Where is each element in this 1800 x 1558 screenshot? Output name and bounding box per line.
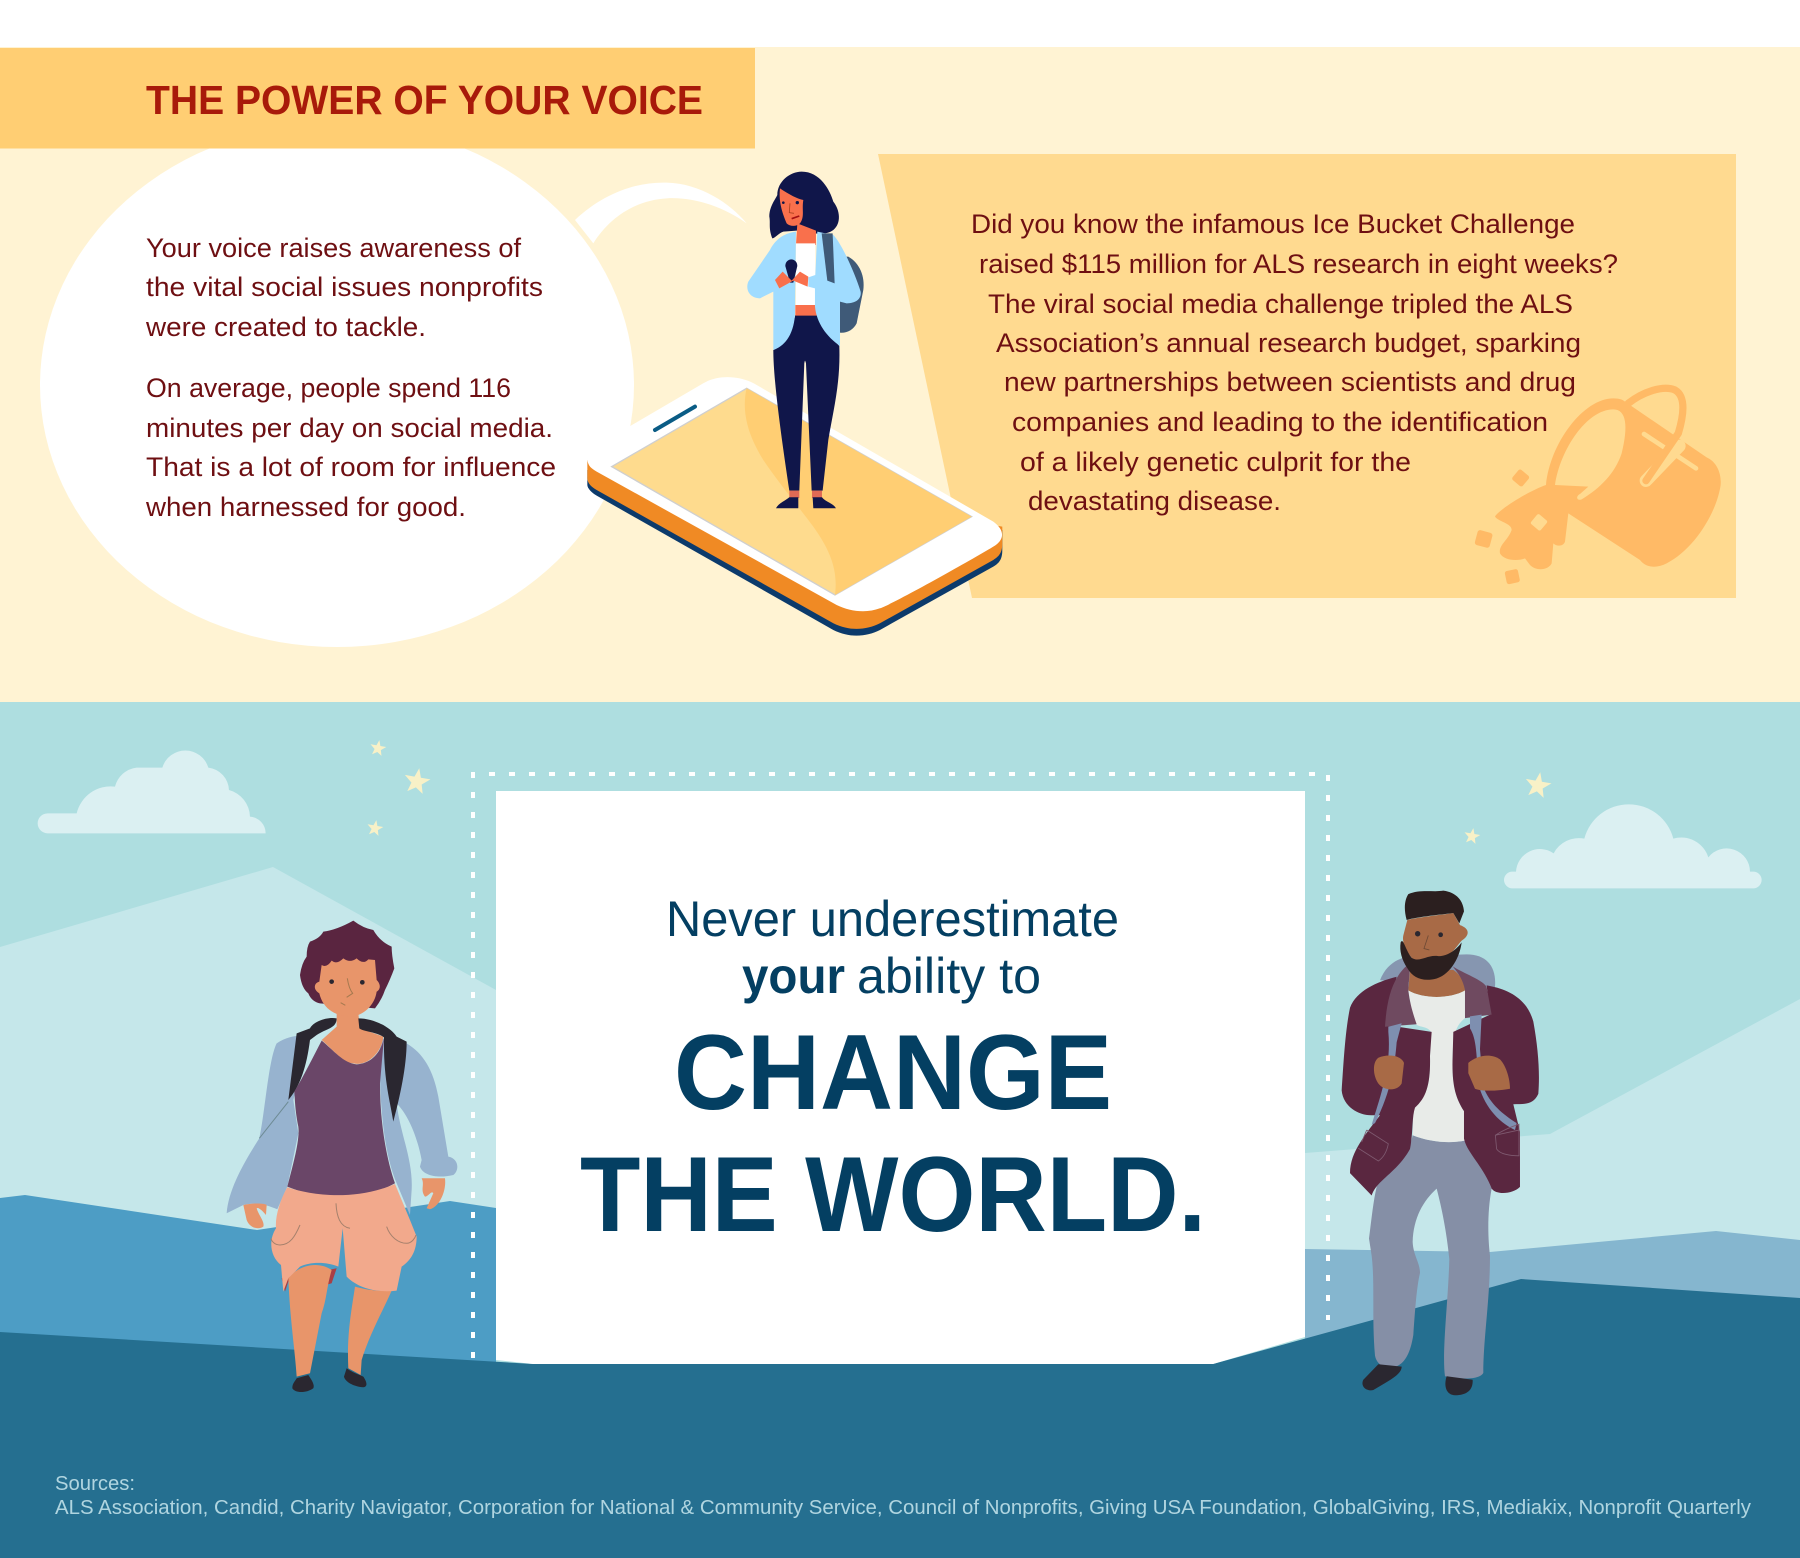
panel: the power of your voice — [0, 47, 1800, 702]
text block: voice raises awareness: the vital social issues nonprofits — [146, 272, 543, 302]
icon: tipping bucket — [1474, 388, 1721, 585]
heading banner — [0, 48, 755, 148]
panel: ice bucket challenge — [878, 154, 1736, 598]
text block: ice bucket challenge: raised $115 million for ALS research in eight weeks? — [979, 249, 1618, 279]
dotted frame — [473, 774, 1328, 1358]
text block: voice raises awareness: On average, people spend 116 — [146, 373, 511, 403]
text block: ice bucket challenge: devastating disease. — [1028, 486, 1281, 516]
card: message — [496, 791, 1305, 1364]
text block: voice raises awareness — [145, 233, 556, 522]
panel: change the world — [0, 702, 1800, 1558]
illustration: woman with microphone — [747, 172, 864, 508]
heading banner: THE POWER OF YOUR VOICE — [146, 77, 703, 123]
text block: ice bucket challenge: Association’s annual research budget, sparking — [996, 328, 1581, 358]
card: message: CHANGE — [674, 1012, 1112, 1132]
illustration: smartphone — [587, 377, 1002, 636]
text block: ice bucket challenge: The viral social media challenge tripled the ALS — [988, 289, 1573, 319]
text block: voice raises awareness: were created to tackle. — [145, 312, 426, 342]
card: message: your — [742, 948, 845, 1004]
card: message: THE WORLD. — [580, 1134, 1206, 1254]
text block: voice raises awareness: That is a lot of room for influence — [146, 452, 556, 482]
text block: ice bucket challenge — [971, 209, 1618, 516]
text block: ice bucket challenge: new partnerships between scientists and drug — [1004, 367, 1576, 397]
speech bubble — [40, 123, 747, 647]
text block: voice raises awareness: Your voice raises awareness of — [146, 233, 521, 263]
illustration: hiker with beard — [1342, 891, 1539, 1395]
card: message: ability to — [857, 948, 1041, 1004]
cloud: left — [38, 751, 266, 833]
text block: ice bucket challenge: of a likely genetic culprit for the — [1020, 447, 1411, 477]
text block: ice bucket challenge: Did you know the infamous Ice Bucket Challenge — [971, 209, 1575, 239]
sources: Sources: — [55, 1473, 135, 1495]
stars — [366, 739, 1553, 844]
mountains — [0, 867, 1800, 1558]
sources: ALS Association, Candid, Charity Navigator, Corporation for National & Community Service, Council of Nonprofits, Giving USA Foundation, GlobalGiving, IRS, Mediakix, Nonprofit Quarterly — [55, 1497, 1751, 1519]
cloud: right — [1504, 804, 1762, 888]
text block: voice raises awareness: minutes per day on social media. — [146, 413, 553, 443]
text block: ice bucket challenge: companies and leading to the identification — [1012, 407, 1548, 437]
text block: voice raises awareness: when harnessed for good. — [145, 492, 466, 522]
card: message: Never underestimate — [666, 891, 1119, 947]
sources — [55, 1473, 1751, 1519]
illustration: hiker with curly hair — [227, 921, 457, 1392]
